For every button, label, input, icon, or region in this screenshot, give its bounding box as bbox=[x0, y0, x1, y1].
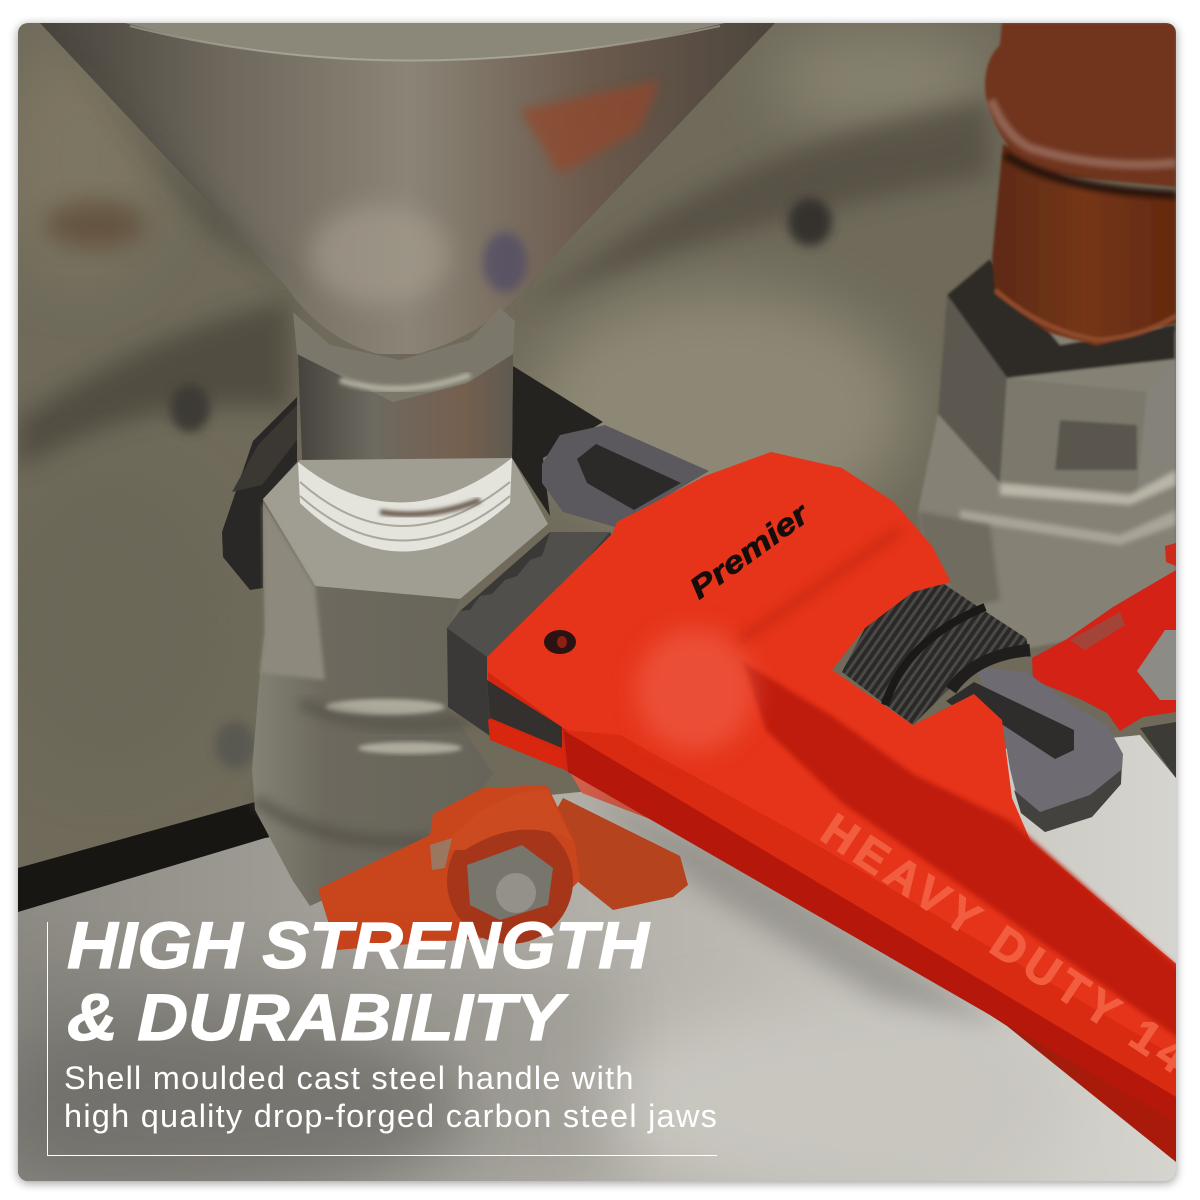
text scrim bbox=[18, 960, 618, 1181]
heading: HIGH STRENGTH bbox=[67, 908, 649, 982]
heading: & DURABILITY bbox=[67, 980, 563, 1054]
right red valve handle bbox=[1032, 543, 1176, 731]
white PTFE thread tape bbox=[298, 458, 512, 552]
vertical pipe bbox=[293, 308, 515, 460]
knurled adjusting nut bbox=[842, 582, 1031, 725]
heading bbox=[67, 908, 651, 1054]
back wrench jaw behind pipe bbox=[222, 366, 603, 590]
description text: Shell moulded cast steel handle with bbox=[64, 1060, 635, 1096]
counter surface bbox=[0, 722, 1176, 1200]
caption frame line bbox=[47, 922, 717, 1156]
moving jaw with serrated teeth bbox=[946, 667, 1123, 832]
brand name on wrench: Premier bbox=[684, 496, 817, 606]
red valve lever and nut bbox=[318, 785, 688, 950]
serrated heel jaw bbox=[447, 532, 612, 736]
funnel hopper bbox=[40, 23, 775, 358]
valve body bbox=[252, 458, 548, 906]
right valve fitting bbox=[918, 259, 1176, 648]
red wrench body bbox=[487, 452, 1181, 1166]
upper sliding hook jaw bbox=[542, 425, 709, 527]
copper pipe bbox=[985, 23, 1176, 346]
description text bbox=[64, 1060, 718, 1134]
description text: high quality drop-forged carbon steel jaws bbox=[64, 1098, 718, 1134]
